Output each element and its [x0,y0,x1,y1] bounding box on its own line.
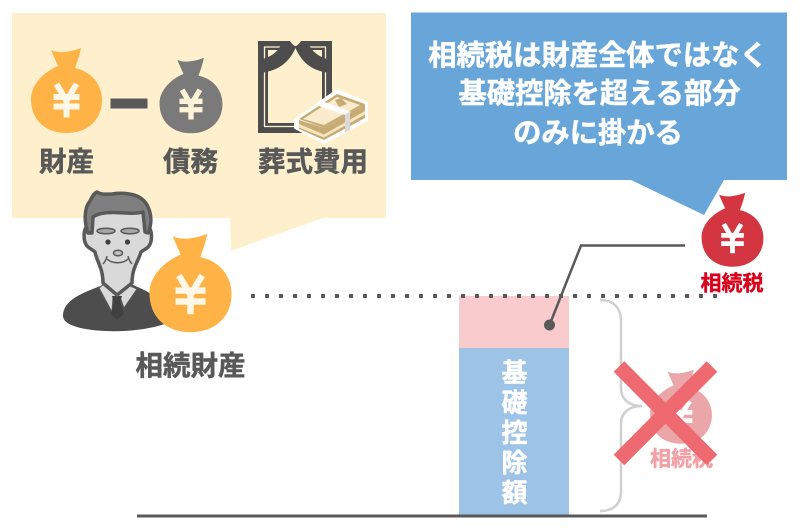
heading text: 相続税は財産全体ではなく [428,39,768,71]
panel: blue speech bubble [411,12,787,215]
panel: yellow speech bubble [12,13,386,251]
vertical label: basic deduction: 礎 [501,388,528,418]
bar: taxable portion [459,296,569,348]
vertical label: basic deduction [501,358,528,508]
baseline [137,514,707,518]
heading text [428,39,768,148]
label: debts: 債務 [163,146,218,177]
label: inherited assets: 相続財産 [136,350,246,381]
label: assets: 財産 [39,146,94,177]
icon: gray money bag [160,58,222,133]
vertical label: basic deduction: 控 [501,418,528,448]
bar: basic deduction [459,348,569,515]
label: inheritance tax: 相続税 [700,272,764,296]
vertical label: basic deduction: 基 [501,358,528,388]
icon: minus sign [110,98,148,108]
crossed-out tax [619,366,713,471]
vertical label: basic deduction: 除 [501,448,528,478]
faded label: 相続税 [650,448,713,471]
heading text: 基礎控除を超える部分 [458,77,741,109]
illustration: elderly man [63,192,170,331]
label: funeral costs: 葬式費用 [258,146,368,177]
icon: orange money bag [31,48,102,133]
dotted line: taxable threshold [251,294,720,298]
icon: inheritance money bag [149,234,232,332]
red cross [619,366,712,460]
icon: funeral frame with curtains [258,41,332,133]
vertical label: basic deduction: 額 [501,478,528,508]
heading text: のみに掛かる [513,116,683,148]
icon: stack of banknotes [295,90,367,143]
icon: inheritance tax money bag [702,193,763,267]
brace [600,300,642,511]
faded money bag [650,370,712,444]
leader line to tax [544,246,685,330]
